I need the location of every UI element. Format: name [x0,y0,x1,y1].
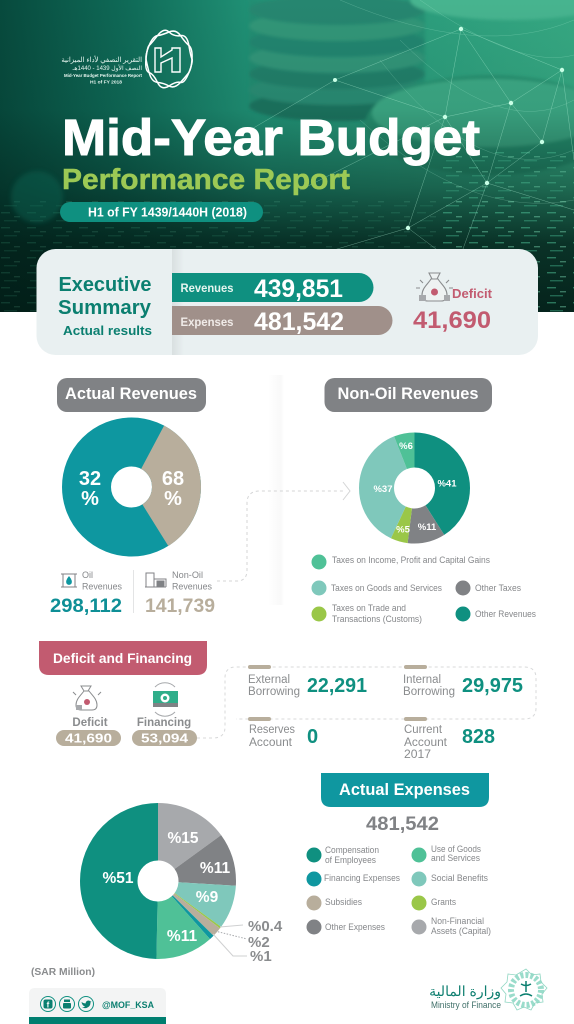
donut chart: 68 [162,468,184,490]
heading: Actual results [63,323,152,338]
donut chart: 32 [79,468,101,490]
external borrowing: External [248,674,290,686]
subtitle: Performance Report [62,164,350,196]
panel: actual revenues [50,378,215,617]
internal borrowing: Internal [403,674,441,686]
deficit label: Deficit [452,286,493,301]
legend: Non-Financial [431,916,484,926]
legend: Grants [431,897,456,907]
callout: small slice labels: %2 [248,934,270,951]
legend: Other Revenues [475,609,536,619]
network nodes [333,27,564,230]
icon: twitter [78,996,94,1012]
internal borrowing: Borrowing [403,686,455,698]
donut chart [79,442,184,532]
reserves account: 0 [307,726,318,748]
heading [321,773,489,807]
logo arabic text: Mid-Year Budget Performance Report [64,73,142,78]
legend: of Employees [325,855,376,865]
icon: facebook: f [47,1000,50,1010]
panel: non-oil revenues [312,378,536,624]
current account [404,717,495,761]
heading: Summary [58,297,152,319]
donut chart: %5 [396,524,411,536]
icon: money bag [416,273,453,301]
current account: 828 [462,726,495,748]
total value: 481,542 [366,814,439,835]
donut chart: %6 [399,441,413,452]
arrow: non-oil connector [217,482,350,581]
oil revenues: Revenues [82,582,122,592]
legend: Assets (Capital) [431,926,491,936]
panel: deficit and financing [39,641,536,761]
heading: Executive [58,274,152,296]
icon: money bag [73,686,101,710]
icon: youtube [60,996,74,1012]
heading [324,378,492,412]
legend: Taxes on Income, Profit and Capital Gains [332,555,490,565]
expenses bar: Expenses [180,315,234,329]
revenues bar [172,273,374,303]
donut chart: %15 [167,830,199,847]
deficit stat: 41,690 [65,732,112,746]
arabic wordmark: وزارة المالية [429,983,501,1000]
heading: Deficit and Financing [53,650,192,666]
legend: Taxes on Goods and Services [331,583,442,593]
donut chart [373,441,457,536]
heading: Non-Oil Revenues [338,384,478,403]
expenses bar: 481,542 [254,308,344,336]
logo arabic text: H1 of FY 2018 [90,80,122,84]
deficit value: 41,690 [413,307,491,334]
heading [58,274,152,338]
internal borrowing: 29,975 [462,675,523,697]
revenues bar: 439,851 [254,275,343,303]
hero background [0,0,574,312]
donut chart: % [164,488,182,510]
heading: Actual Revenues [65,384,197,403]
donut chart: % [81,488,99,510]
donut chart: %11 [167,928,197,945]
callout: small slice labels: %1 [250,948,272,965]
external borrowing: 22,291 [307,675,367,697]
coin stacks [249,0,574,175]
revenues bar: Revenues [180,281,234,295]
title: Mid-Year Budget [62,109,480,166]
legend: Compensation [325,845,379,855]
donut chart: %9 [196,889,219,906]
icon: banknote [153,683,178,716]
legend: and Services [431,853,480,863]
legend: Financing Expenses [324,873,400,883]
social media panel [29,988,166,1024]
current account: Current [404,724,443,736]
financing stat: Financing [137,717,191,729]
donut chart: %11 [200,860,230,877]
heading [57,378,206,412]
heading: Actual Expenses [339,780,470,799]
logo H1 mark [155,48,180,72]
legend: Transactions (Customs) [332,614,422,624]
external borrowing [248,665,367,698]
donut chart: %51 [102,870,134,887]
english wordmark: Ministry of Finance [431,1000,501,1010]
icon: oil barrel [61,574,77,587]
logo arabic text [61,54,142,84]
legend: Other Expenses [325,922,385,932]
ministry of finance logo [429,969,547,1010]
non-oil revenues: 141,739 [145,596,215,617]
non-oil revenues: Revenues [172,582,212,592]
legend: Use of Goods [431,844,481,854]
handle: @MOF_KSA [102,1000,154,1011]
deficit stat [56,717,121,746]
internal borrowing [403,665,523,698]
reserves account [248,717,318,749]
legend [312,554,536,624]
expenses bar [172,306,392,336]
current account: 2017 [404,749,431,761]
logo ring [146,30,192,88]
financing stat [132,717,197,746]
icon: factory [145,573,166,587]
financing stat: 53,094 [141,732,188,746]
oil revenues [50,570,122,617]
legend: Taxes on Trade and [332,603,406,613]
network lines [250,0,574,312]
unit note: (SAR Million) [31,966,95,978]
callout: small slice labels: %0.4 [248,918,283,935]
oil revenues: Oil [82,570,93,580]
period pill [60,202,263,222]
dashed bracket [197,667,536,738]
emblem [501,969,547,1010]
legend: Subsidies [325,897,362,907]
donut chart [102,830,230,945]
callout: small slice labels [213,918,283,965]
heading [39,641,207,675]
legend [306,844,491,936]
period pill: H1 of FY 1439/1440H (2018) [88,204,247,220]
non-oil revenues: Non-Oil [172,570,203,580]
non-oil revenues [145,570,215,617]
donut chart: %37 [373,484,393,495]
logo arabic text: النصف الأول 1439 - 1440هـ [72,63,142,72]
reserves account: Reserves [249,724,295,736]
legend: Social Benefits [431,873,488,883]
donut chart: %41 [437,478,457,490]
external borrowing: Borrowing [248,686,300,698]
panel: executive summary [36,249,538,355]
oil revenues: 298,112 [50,596,122,617]
donut chart: %11 [418,522,437,533]
legend: Other Taxes [475,583,521,593]
logo arabic text: التقرير النصفي لأداء الميزانية [61,54,142,64]
current account: Account [404,737,448,749]
panel: actual expenses [102,773,491,965]
deficit stat: Deficit [72,717,108,729]
reserves account: Account [249,737,293,749]
report logo [61,30,192,88]
